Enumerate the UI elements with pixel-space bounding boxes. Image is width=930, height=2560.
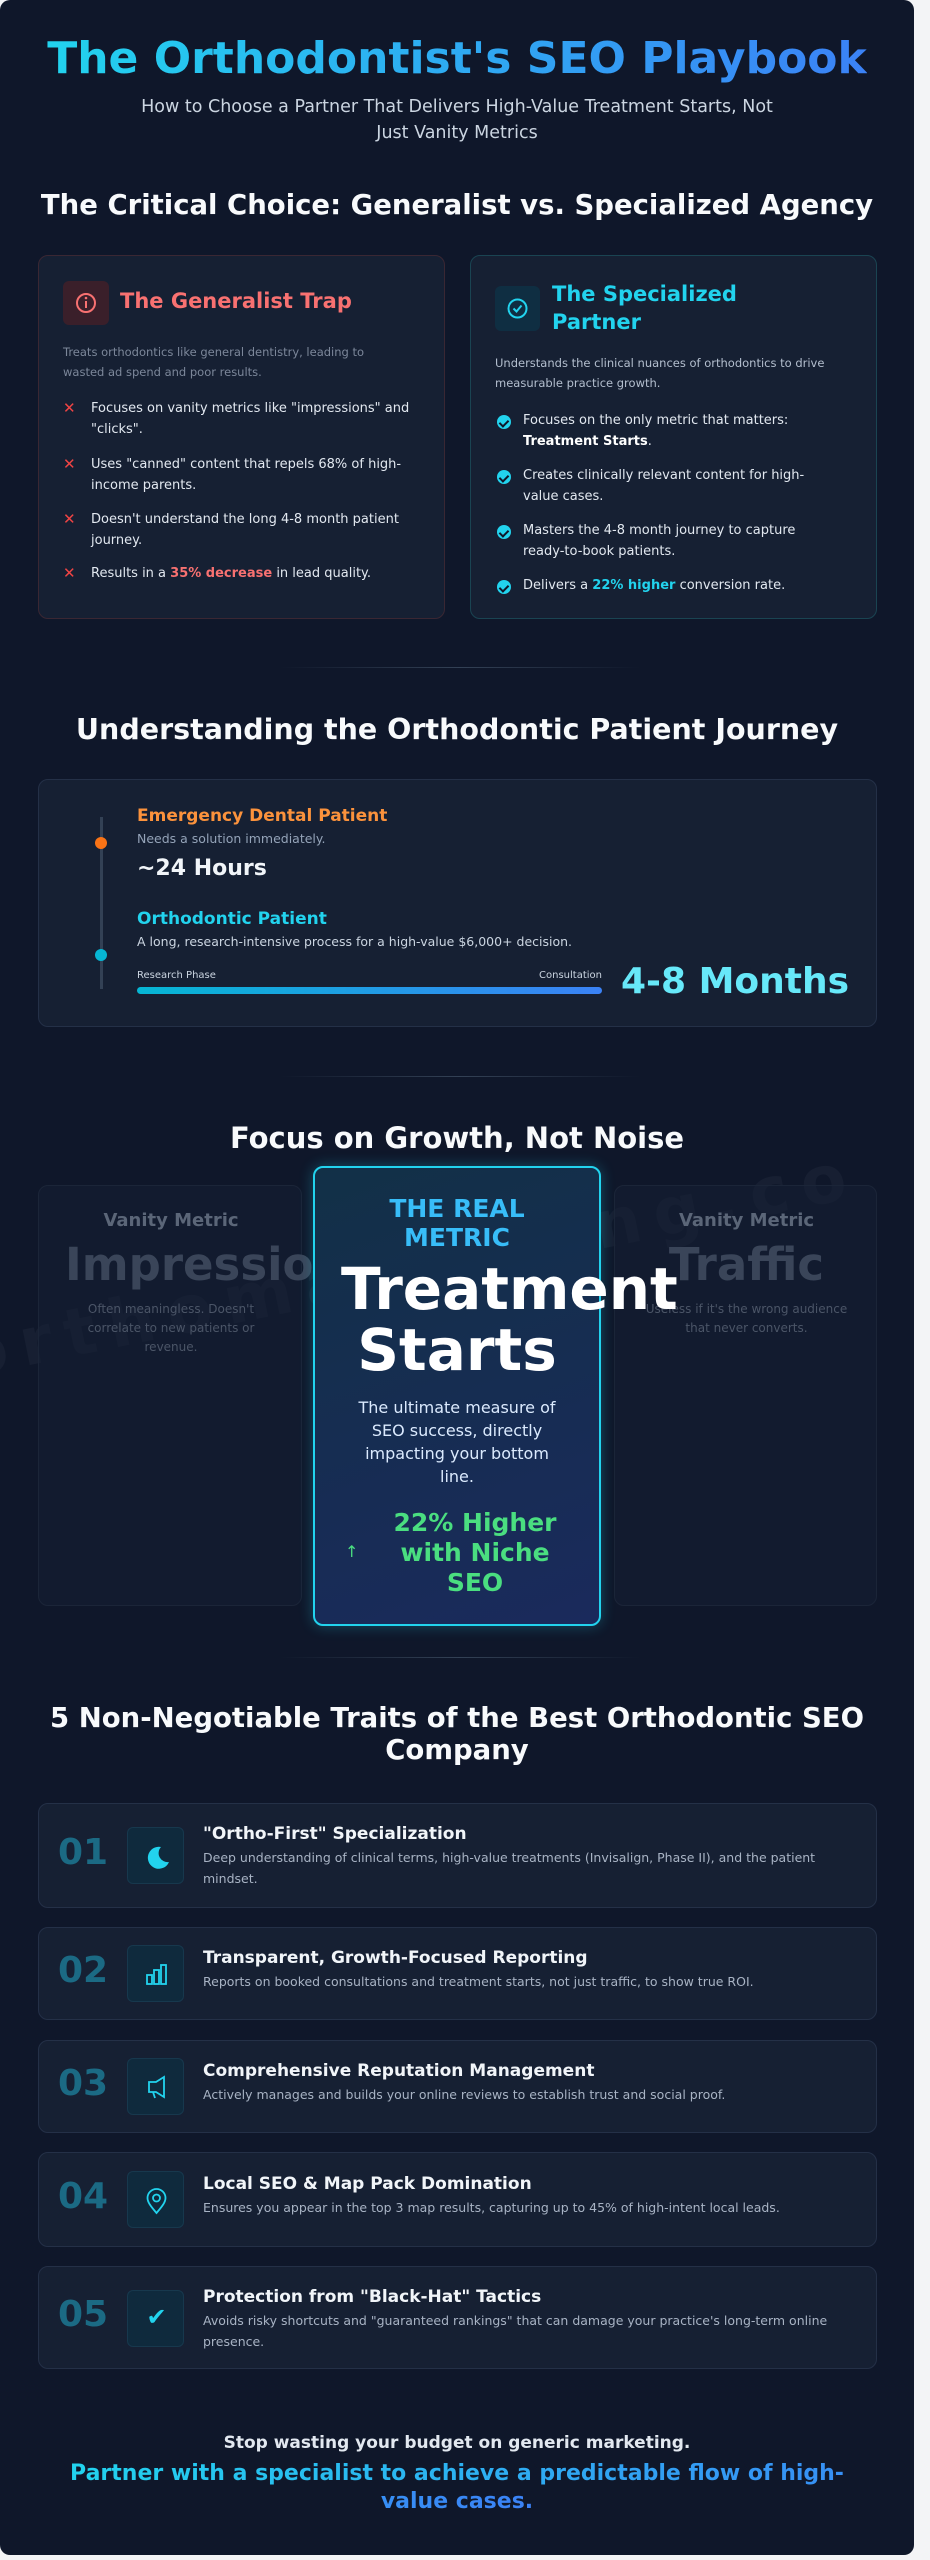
- heading: The Specialized Partner: [552, 282, 737, 334]
- bullet list: [497, 413, 804, 594]
- bullet list: [63, 399, 409, 582]
- bullet list: Delivers a 22% higher conversion rate.: [523, 578, 785, 593]
- heading: patient journey: Understanding the Orthodontic Patient Journey: [76, 713, 838, 746]
- card: the real metric: The ultimate measure of SEO success, directly impacting your bottom line.: [358, 1398, 556, 1486]
- timeline line and dots: [100, 817, 103, 989]
- progress bar: [137, 970, 602, 994]
- trait 01: "Ortho-First" Specialization: [203, 1824, 467, 1844]
- bullet list: Focuses on vanity metrics like "impressions" and "clicks".: [91, 401, 409, 437]
- emergency patient: Needs a solution immediately.: [137, 831, 326, 846]
- icon: check badge: [495, 286, 540, 331]
- trait 04: 04: [58, 2176, 108, 2217]
- orthodontic patient: A long, research-intensive process for a high-value $6,000+ decision.: [137, 934, 572, 949]
- description: Treats orthodontics like general dentistry, leading to wasted ad spend and poor results.: [63, 345, 364, 379]
- icon: info: [63, 281, 109, 325]
- trait 02: [38, 1927, 877, 2020]
- trait 02: Transparent, Growth-Focused Reporting: [203, 1948, 588, 1968]
- bullet list: Focuses on the only metric that matters: Treatment Starts.: [523, 413, 788, 449]
- footer callout: Partner with a specialist to achieve a predictable flow of high-value cases.: [70, 2461, 844, 2514]
- heading: 5 traits: 5 Non-Negotiable Traits of the Best Orthodontic SEO Company: [50, 1702, 864, 1766]
- heading: critical choice: The Critical Choice: Generalist vs. Specialized Agency: [41, 189, 873, 221]
- card: vanity metric traffic: Vanity Metric: [679, 1210, 814, 1231]
- panel: specialized partner: [470, 255, 877, 619]
- card: vanity metric impressions: Impressions: [65, 1238, 372, 1291]
- 4-8 months: 4-8 Months: [621, 961, 849, 1002]
- emergency patient: [137, 806, 387, 881]
- panel: generalist trap: [38, 255, 445, 619]
- trait 01: 01: [58, 1832, 108, 1873]
- trait 03: 03: [58, 2063, 108, 2104]
- heading: The Generalist Trap: [120, 289, 352, 313]
- trait 03: Actively manages and builds your online reviews to establish trust and social proof.: [203, 2087, 725, 2102]
- card: the real metric: [313, 1166, 601, 1626]
- trait 02: Reports on booked consultations and treatment starts, not just traffic, to show true ROI.: [203, 1974, 754, 1989]
- emergency patient: ~24 Hours: [137, 856, 267, 881]
- progress bar: Consultation: [539, 970, 602, 981]
- card: vanity metric impressions: [38, 1185, 302, 1606]
- card: vanity metric traffic: Traffic: [669, 1238, 824, 1291]
- trait 05: [38, 2266, 877, 2369]
- bullet list: Doesn't understand the long 4-8 month patient journey.: [91, 512, 399, 548]
- trait 02: 02: [58, 1950, 108, 1991]
- trait 04: Local SEO & Map Pack Domination: [203, 2174, 532, 2194]
- panel: patient journey timeline: [38, 779, 877, 1027]
- footer callout: Stop wasting your budget on generic marketing.: [224, 2433, 690, 2453]
- title: The Orthodontist's SEO Playbook: [47, 33, 867, 84]
- stat: 22% higher: 22% Higher with Niche SEO: [393, 1508, 556, 1597]
- trait 03: Comprehensive Reputation Management: [203, 2061, 594, 2081]
- card: vanity metric traffic: [614, 1185, 877, 1606]
- trait 04: Ensures you appear in the top 3 map results, capturing up to 45% of high-intent local leads.: [203, 2200, 780, 2215]
- card: the real metric: Treatment: [341, 1255, 678, 1323]
- bullet list: Results in a 35% decrease in lead quality.: [91, 566, 371, 581]
- card: the real metric: THE REAL METRIC: [389, 1194, 525, 1252]
- card: vanity metric impressions: Vanity Metric: [103, 1210, 239, 1231]
- bullet list: Masters the 4-8 month journey to capture ready-to-book patients.: [523, 523, 795, 559]
- subtitle: How to Choose a Partner That Delivers High-Value Treatment Starts, Not Just Vanity Metrics: [141, 97, 773, 143]
- card: vanity metric impressions: Often meaningless. Doesn't correlate to new patients or revenue.: [88, 1302, 254, 1354]
- bullet list: Uses "canned" content that repels 68% of high-income parents.: [91, 457, 401, 493]
- trait 05: 05: [58, 2294, 108, 2335]
- icon: moon: [127, 1827, 184, 1884]
- icon: bar chart: [127, 1945, 184, 2002]
- icon: checkmark: [127, 2290, 184, 2347]
- icon: megaphone: [127, 2058, 184, 2115]
- trait 05: Avoids risky shortcuts and "guaranteed rankings" that can damage your practice's long-term online presence.: [203, 2313, 827, 2349]
- bullet list: ✕: [63, 455, 76, 473]
- trait 05: Protection from "Black-Hat" Tactics: [203, 2287, 541, 2307]
- card: vanity metric traffic: Useless if it's the wrong audience that never converts.: [646, 1302, 847, 1335]
- orthodontic patient: Orthodontic Patient: [137, 909, 327, 929]
- orthodontic patient: [137, 909, 572, 949]
- description: Understands the clinical nuances of orthodontics to drive measurable practice growth.: [495, 356, 824, 390]
- card: the real metric: Starts: [357, 1316, 557, 1384]
- emergency patient: Emergency Dental Patient: [137, 806, 387, 826]
- footer callout: [70, 2433, 844, 2514]
- stat: 22% higher: ↑: [345, 1542, 358, 1561]
- bullet list: Creates clinically relevant content for high-value cases.: [523, 468, 804, 504]
- progress bar: Research Phase: [137, 970, 216, 981]
- bullet list: ✕: [63, 510, 76, 528]
- trait 03: [38, 2040, 877, 2133]
- bullet list: ✕: [63, 564, 76, 582]
- icon: map pin: [127, 2171, 184, 2228]
- trait 01: [38, 1803, 877, 1908]
- trait 01: Deep understanding of clinical terms, high-value treatments (Invisalign, Phase II), and the patient mindset.: [203, 1850, 815, 1886]
- trait 04: [38, 2152, 877, 2247]
- heading: focus on growth: Focus on Growth, Not Noise: [230, 1121, 684, 1155]
- bullet list: ✕: [63, 399, 76, 417]
- icon: checkmark: ✔: [146, 2303, 167, 2331]
